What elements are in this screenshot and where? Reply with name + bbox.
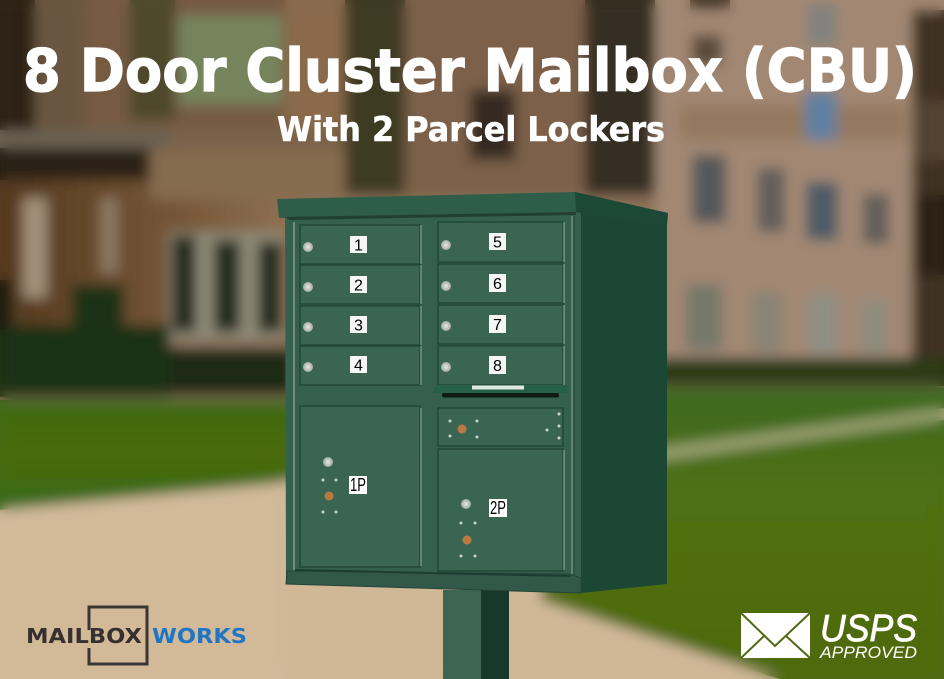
- roof: [277, 192, 668, 225]
- USPS wordmark: USPS: [820, 608, 917, 650]
- door 8: [438, 346, 564, 385]
- door 5: 5: [493, 234, 502, 252]
- USPS approved badge: [741, 608, 917, 662]
- logo word: works: WORKS: [152, 624, 247, 648]
- door 3: 3: [354, 318, 363, 334]
- door 2: [300, 265, 421, 304]
- door 6: 6: [493, 276, 502, 293]
- subtitle: With 2 Parcel Lockers: [277, 110, 665, 150]
- door 2: 2: [354, 278, 363, 294]
- left column doors: [300, 225, 421, 385]
- door 3: [300, 306, 421, 345]
- logo square: [89, 607, 147, 664]
- door 6: [438, 264, 564, 303]
- right column doors: [438, 222, 564, 385]
- Mailbox Works logo: [26, 607, 247, 664]
- mailbox post: [443, 590, 509, 679]
- icon: envelope: [741, 613, 810, 658]
- door 7: 7: [493, 317, 502, 334]
- label 1P: 1P: [350, 475, 366, 495]
- door 4: 4: [354, 358, 363, 374]
- door 7: [438, 305, 564, 344]
- door 1: 1: [354, 238, 363, 254]
- logo word: mailbox: MAILBOX: [26, 624, 143, 648]
- approved wordmark: APPROVED: [819, 643, 917, 662]
- door 4: [300, 346, 421, 385]
- parcel locker 2P: [438, 449, 564, 571]
- cluster mailbox unit: [277, 192, 668, 593]
- cabinet side panel: [581, 212, 667, 593]
- outgoing mail slot: [432, 385, 568, 398]
- door 8: 8: [493, 358, 502, 375]
- label 2P: 2P: [490, 498, 506, 518]
- door 5: [438, 222, 564, 262]
- front frame lines: [286, 216, 581, 593]
- parcel locker 1P: [300, 406, 421, 567]
- outgoing mail compartment: [438, 408, 563, 446]
- cabinet front: [285, 212, 581, 593]
- door 1: [300, 225, 421, 264]
